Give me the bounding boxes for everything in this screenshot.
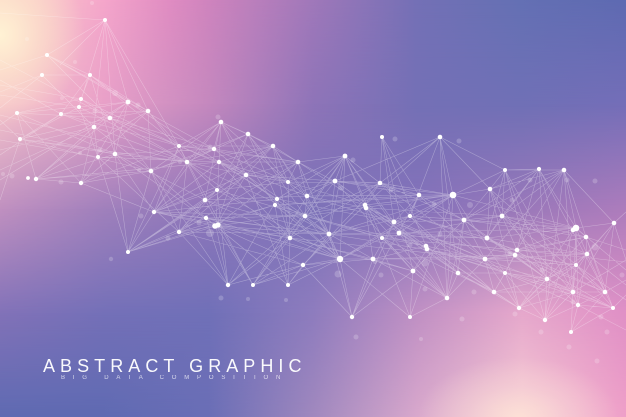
network nodes	[15, 18, 616, 334]
connecting lines	[0, 13, 626, 332]
subtitle: BIG DATA COMPOSITION	[61, 375, 288, 381]
title: ABSTRACT GRAPHIC	[43, 356, 306, 376]
